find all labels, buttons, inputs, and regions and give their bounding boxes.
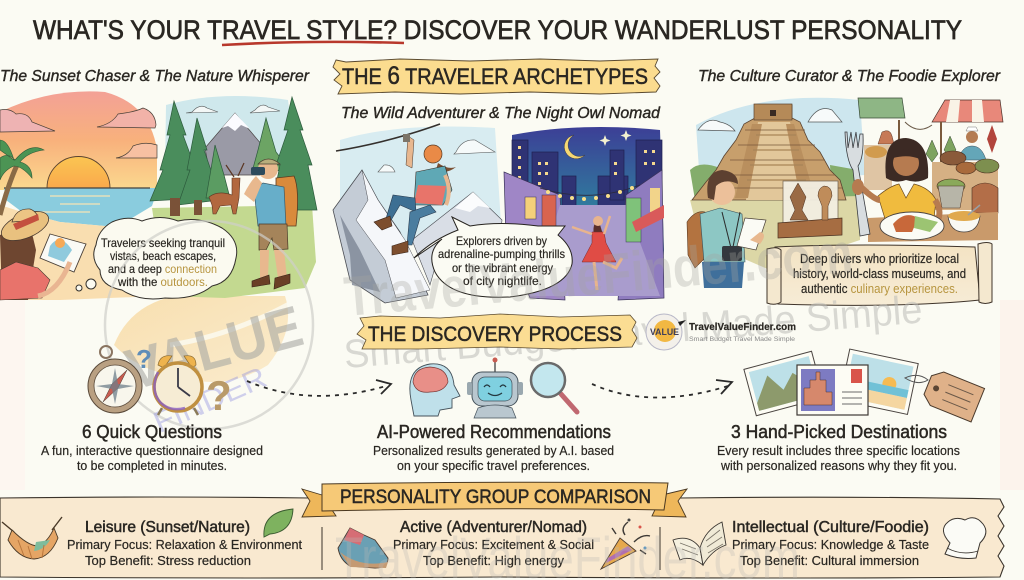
group: leisure: Top Benefit: Stress reduction [85,554,251,568]
dancer in red dress [572,216,622,290]
step: 6 quick questions: A fun, interactive questionnaire designed [41,444,263,458]
hiker with binoculars [244,159,298,289]
subheading: culture and foodie: The Culture Curator & The Foodie Explorer [698,68,1001,85]
panel: culture curator illustration [687,98,865,288]
icon: leaf [264,509,293,537]
group: leisure: Primary Focus: Relaxation & Environment [67,538,303,552]
step: 3 hand-picked destinations: 3 Hand-Picked Destinations [731,422,947,442]
step: 3 hand-picked destinations: Every result includes three specific locations [717,444,960,458]
scroll: culture and foodie description: authentic culinary experiences. [801,281,958,296]
speech bubble: adventurer and nomad description: or the vibrant energy [452,261,553,275]
icon: hammock [2,517,62,559]
logo: travelvaluefinder: VALUE [650,327,679,337]
scroll: culture and foodie description [767,242,992,305]
group: leisure [67,519,303,568]
palm tree [0,140,44,215]
logo: travelvaluefinder [646,314,796,350]
icon: alarm clock [154,356,202,415]
plate of food [880,212,944,240]
icon: question mark large: ? [206,372,232,419]
giant fork [845,132,870,236]
icon: open book [673,522,726,565]
group: active: Primary Focus: Excitement & Social [393,538,594,552]
step: 3 hand-picked destinations [717,422,960,473]
thought bubble: sunset and nature description [76,218,237,299]
deer [209,163,244,214]
market vendor [958,127,986,160]
panel: personality group comparison band [0,482,1004,578]
museum display case [778,181,842,238]
scroll: culture and foodie description: Deep divers who prioritize local [800,251,959,266]
thought bubble: sunset and nature description: with the outdoors. [117,275,208,289]
step: ai-powered recommendations [373,422,614,473]
mountains [333,170,502,303]
group: active: Top Benefit: High energy [423,554,565,568]
speech bubble: adventurer and nomad description: adrenaline-pumping thrills [438,247,565,261]
watermark: value finder badge [105,221,313,440]
soup bowl [948,205,980,232]
logo: travelvaluefinder: TravelValueFinder.com [689,321,796,333]
group: intellectual: Top Benefit: Cultural immersion [740,554,919,568]
speech bubble: adventurer and nomad description [414,217,572,297]
logo: travelvaluefinder: Smart Budget Travel Made Simple [689,336,795,343]
icon: friendly robot [467,358,523,418]
divider: active and intellectual [659,527,661,570]
thought bubble: sunset and nature description: Travelers seeking tranquil [101,236,225,250]
side tint [0,300,1024,490]
step: ai-powered recommendations: on your specific travel preferences. [397,459,590,473]
subheading: sunset and nature: The Sunset Chaser & The Nature Whisperer [0,68,310,85]
panel: night owl nomad illustration [504,127,664,300]
ribbon banner: PERSONALITY GROUP COMPARISON [340,487,651,508]
icon: running shoe [338,528,388,568]
speech bubble: adventurer and nomad description: Explorers driven by [456,234,547,248]
scroll: culture and foodie description: history, world-class museums, and [793,266,966,281]
subheading: wild adventurer and night owl: The Wild Adventurer & The Night Owl Nomad [341,105,661,122]
group: intellectual: Primary Focus: Knowledge & Taste [732,538,929,552]
arrow: questions to recommendations [247,380,391,396]
step: ai-powered recommendations: AI-Powered Recommendations [377,422,611,442]
icon: question mark small: ? [136,344,152,374]
foodie woman [862,138,939,222]
icon: chef hat [943,518,986,558]
panel: wild adventurer illustration [333,124,502,303]
watermark: value finder badge: FINDER [149,361,272,440]
heading: the discovery process: THE DISCOVERY PROCESS [368,323,622,346]
icon: brain head [410,364,460,416]
watermark: tagline diagonal: Smart Budget Travel Made Simple [342,288,924,377]
speech bubble: adventurer and nomad description: of city nightlife. [463,274,542,288]
group: intellectual: Intellectual (Culture/Foodie) [732,519,929,536]
panel: sunset chaser illustration [0,91,170,300]
heading: the 6 traveler archetypes: THE 6 TRAVELER ARCHETYPES [342,62,648,90]
group: active: Active (Adventurer/Nomad) [400,519,587,536]
panel: foodie explorer illustration [845,98,1003,242]
pyramid [692,104,846,200]
icon: magnifying glass [531,363,577,412]
market food stall [932,151,999,213]
arrow: recommendations to destinations [592,380,732,398]
step: ai-powered recommendations: Personalized results generated by A.I. based [373,444,614,458]
sketching traveler [0,206,86,300]
heading: the discovery process [357,314,637,349]
icon: party popper [601,518,650,569]
thought bubble: sunset and nature description: vistas, beach escapes, [110,249,216,263]
thought bubble: sunset and nature description: and a deep connection [108,262,217,276]
watermark: value finder badge: VALUE [119,294,309,403]
step: 3 hand-picked destinations: with personalized reasons why they fit you. [720,459,957,473]
icon: destination postcards [744,349,985,422]
curator with notebook [687,170,766,288]
watermark: site name diagonal: TravelValueFinder.com [342,221,855,328]
divider: leisure and active [321,527,323,570]
panel: nature whisperer illustration [150,96,317,298]
watermark: badge colour swoosh [114,296,300,382]
step: 6 quick questions: to be completed in minutes. [77,459,227,473]
group: intellectual [732,519,929,568]
group: active [393,519,594,568]
ribbon banner [302,482,687,517]
icon: compass [88,346,142,413]
step: 6 quick questions [41,422,263,473]
step: 6 quick questions: 6 Quick Questions [82,422,222,442]
zipline climber [374,134,456,255]
group: leisure: Leisure (Sunset/Nature) [85,519,250,536]
